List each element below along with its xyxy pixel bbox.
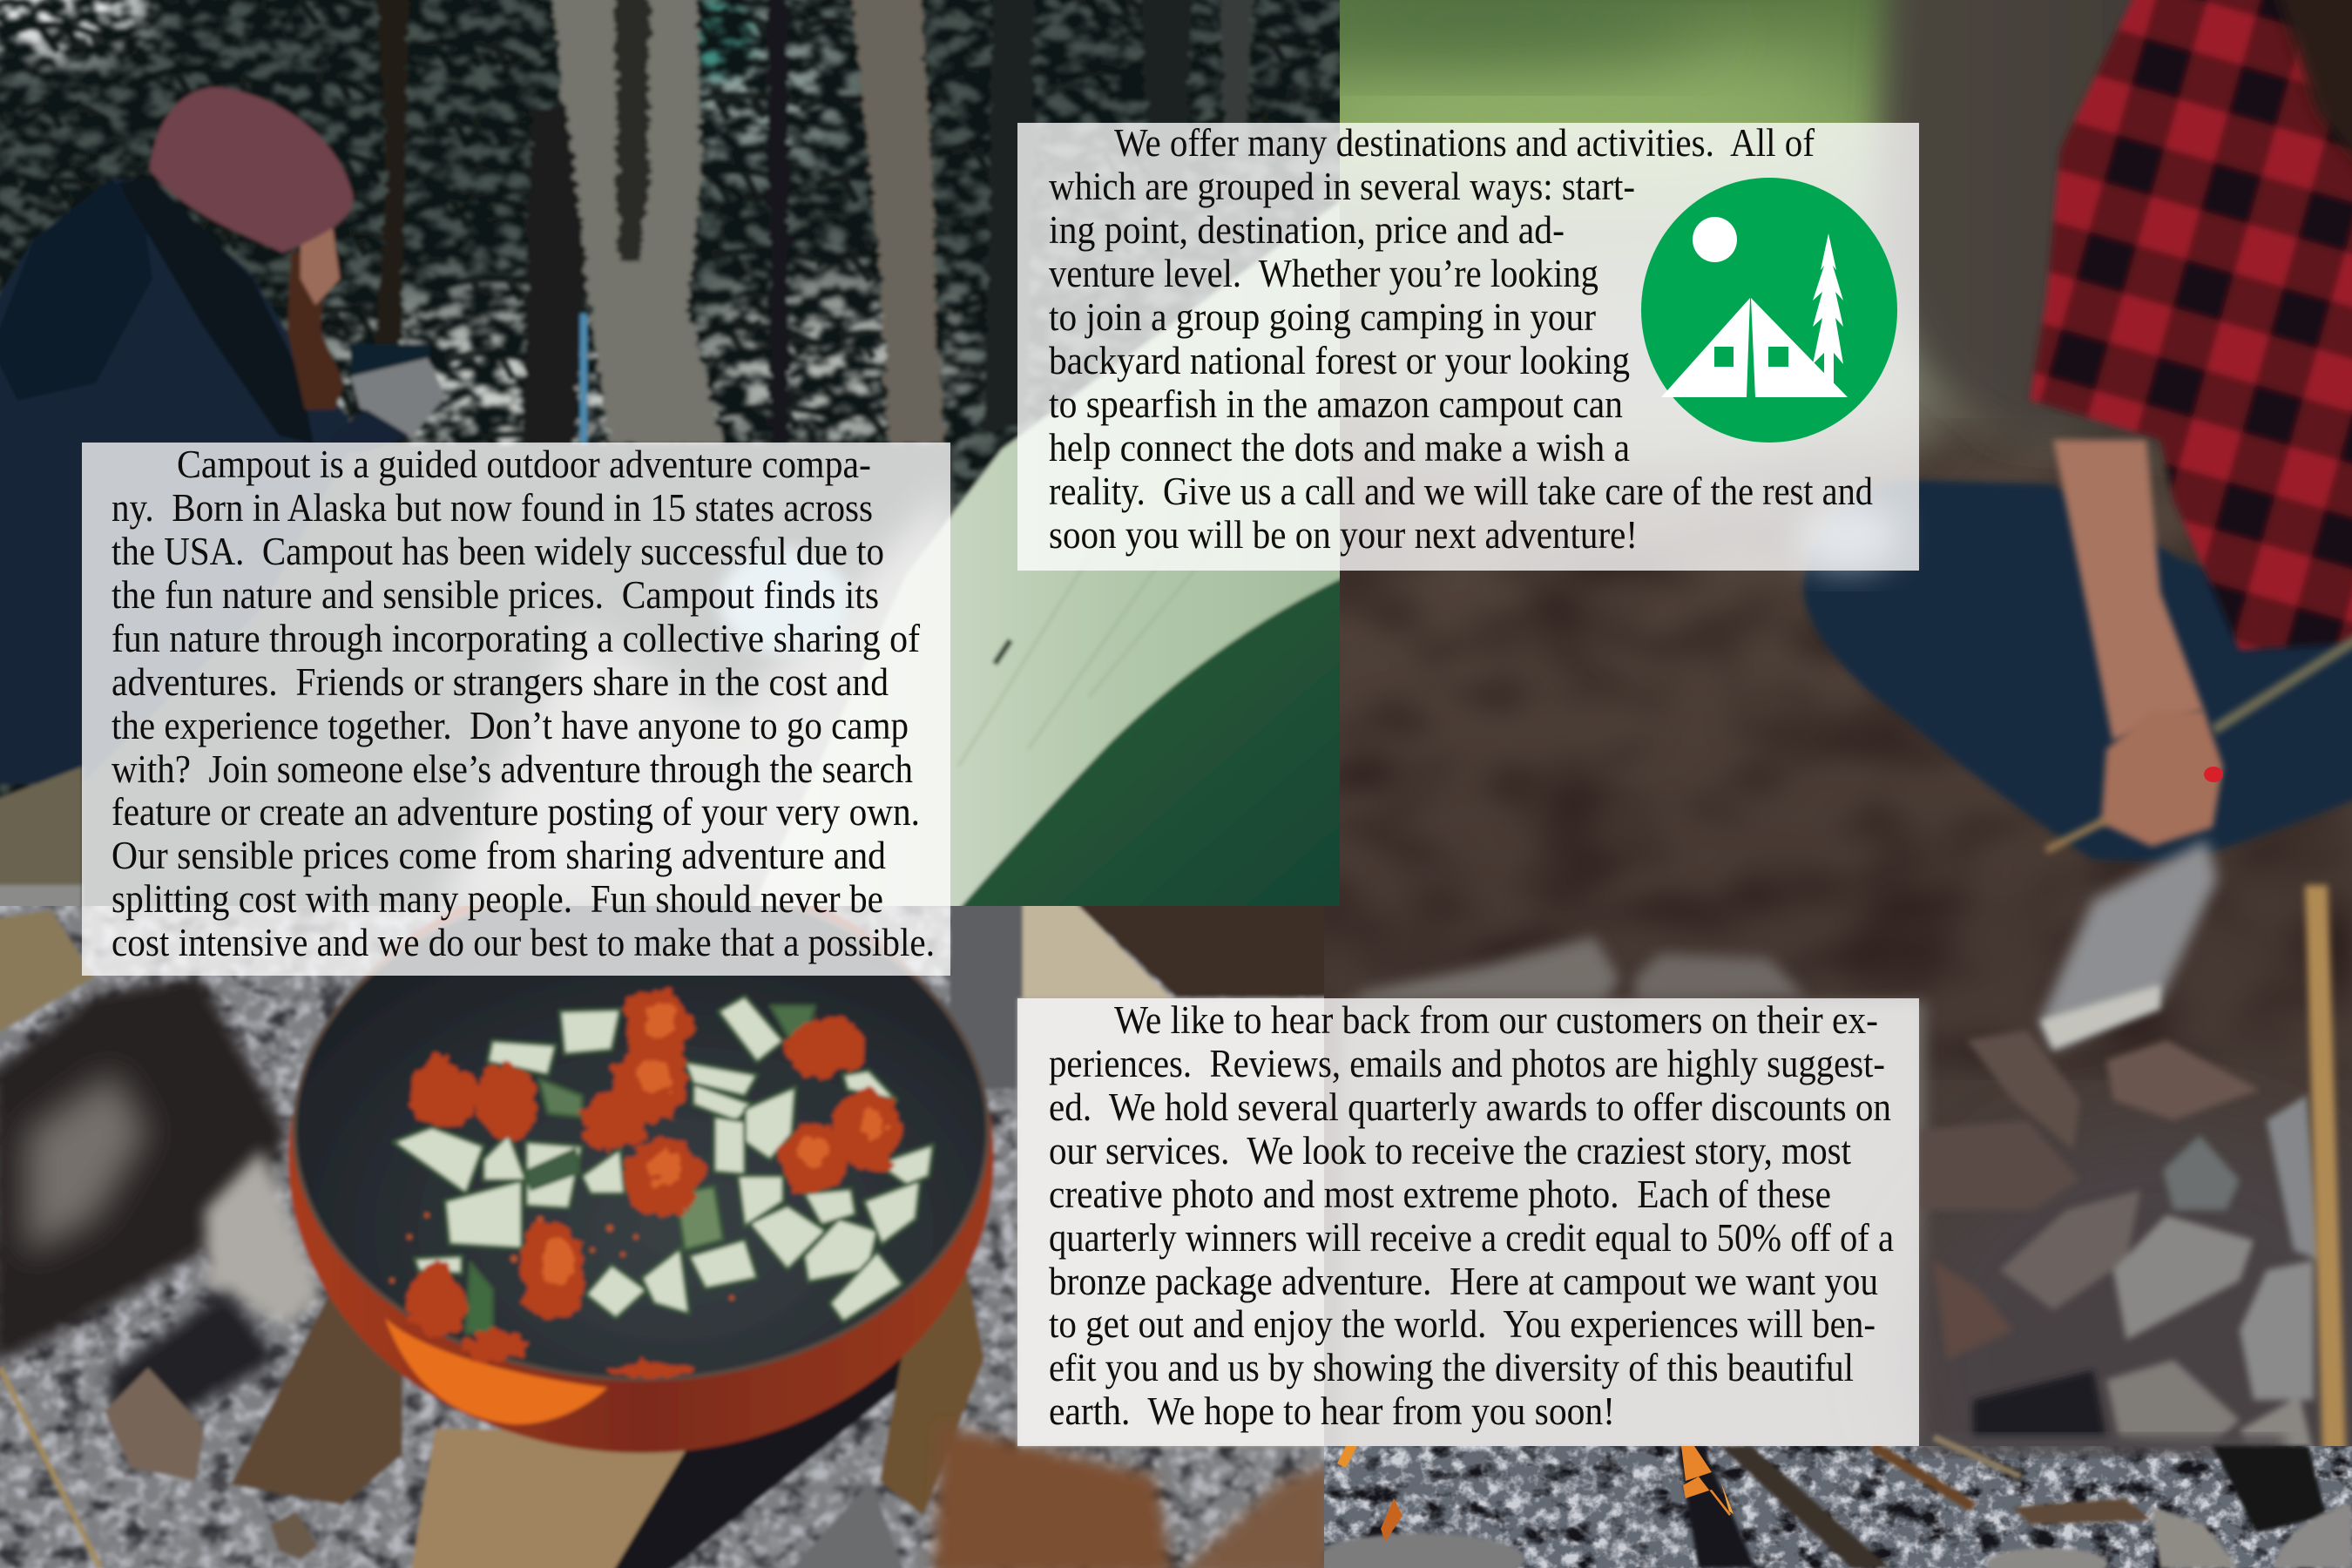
woman: hair xyxy=(287,251,344,409)
shirt xyxy=(2030,0,2352,650)
shoe xyxy=(2040,840,2217,1050)
text panel: customer reviews: our services. We look to receive the craziest story, most xyxy=(1049,1129,1851,1173)
food: zucchini xyxy=(394,997,933,1333)
stones and rocks xyxy=(1343,931,2352,1446)
text panel: company introduction: with? Join someone else’s adventure through the search xyxy=(112,747,913,791)
tent xyxy=(749,196,1348,915)
text panel: destinations and activities: help connect the dots and make a wish a xyxy=(1049,426,1630,470)
hand xyxy=(2101,710,2223,847)
woman: hat xyxy=(150,87,353,253)
woman: jacket xyxy=(0,87,445,915)
text panel: company introduction: splitting cost with many people. Fun should never be xyxy=(112,877,883,921)
food: spice flecks xyxy=(389,1213,734,1301)
photo: person crouching by campfire xyxy=(1254,0,2352,1568)
text panel: destinations and activities: to spearfish in the amazon campout can xyxy=(1049,382,1623,426)
stick xyxy=(2046,632,2352,850)
flames xyxy=(1337,1446,1734,1542)
photo: cooking pan over fire xyxy=(0,864,1333,1568)
text panel: destinations and activities: ing point, destination, price and ad- xyxy=(1049,208,1565,252)
wood pieces xyxy=(0,910,94,1037)
photo: woman in forest with tent xyxy=(0,0,1350,915)
text panel: customer reviews: bronze package adventure. Here at campout we want you xyxy=(1049,1260,1878,1303)
ash bed xyxy=(1307,1436,2352,1568)
text panel: destinations and activities xyxy=(1017,121,1919,571)
pan interior xyxy=(294,881,988,1379)
text panel: destinations and activities: which are grouped in several ways: start- xyxy=(1049,165,1635,208)
text panel: company introduction: feature or create an adventure posting of your very own. xyxy=(112,790,920,834)
text panel: company introduction: adventures. Friends or strangers share in the cost and xyxy=(112,660,889,704)
text panel: customer reviews: periences. Reviews, emails and photos are highly suggest- xyxy=(1049,1042,1885,1085)
woman: glove xyxy=(351,358,445,439)
food: sausage xyxy=(406,989,903,1378)
charred logs xyxy=(1315,1437,2352,1568)
icon: campout logo xyxy=(1641,178,1897,443)
text panel: customer reviews: earth. We hope to hear from you soon! xyxy=(1049,1389,1615,1433)
text panel: customer reviews: We like to hear back from our customers on their ex- xyxy=(1114,998,1878,1042)
text panel: company introduction: the USA. Campout has been widely successful due to xyxy=(112,530,884,573)
arm xyxy=(2053,440,2204,740)
foliage xyxy=(0,0,1350,915)
text panel: company introduction: cost intensive and we do our best to make that a possible. xyxy=(112,921,935,964)
text panel: destinations and activities: backyard national forest or your looking xyxy=(1049,339,1630,382)
text panel: company introduction: ny. Born in Alaska but now found in 15 states across xyxy=(112,486,873,530)
text panel: company introduction xyxy=(82,443,950,976)
text panel: customer reviews: ed. We hold several quarterly awards to offer discounts on xyxy=(1049,1085,1891,1129)
text panel: customer reviews: creative photo and most extreme photo. Each of these xyxy=(1049,1173,1831,1216)
wooden post xyxy=(2305,885,2347,1480)
burnt log on the left xyxy=(0,976,287,1368)
text panel: customer reviews: to get out and enjoy the world. You experiences will ben- xyxy=(1049,1302,1876,1346)
text panel: destinations and activities: We offer many destinations and activities. All of xyxy=(1114,121,1815,165)
text panel: destinations and activities: venture level. Whether you’re looking xyxy=(1049,252,1598,295)
text panel: company introduction: Our sensible prices come from sharing adventure and xyxy=(112,834,886,877)
text panel: customer reviews: quarterly winners will receive a credit equal to 50% off of a xyxy=(1049,1216,1894,1260)
text panel: company introduction: Campout is a guided outdoor adventure compa- xyxy=(177,443,871,486)
pan handle xyxy=(385,1318,607,1424)
text panel: company introduction: the experience together. Don’t have anyone to go camp xyxy=(112,704,909,747)
tree trunks xyxy=(375,0,1254,444)
scene behind text panel xyxy=(82,444,953,915)
woman: mug xyxy=(349,344,430,383)
text panel: customer reviews: efit you and us by showing the diversity of this beautiful xyxy=(1049,1346,1854,1389)
pan body xyxy=(288,864,994,1453)
text panel: destinations and activities: soon you will be on your next adventure! xyxy=(1049,513,1638,557)
text panel: destinations and activities: reality. Give us a call and we will take care of the rest and xyxy=(1049,470,1873,513)
text panel: customer reviews xyxy=(1017,998,1919,1446)
text panel: company introduction: the fun nature and sensible prices. Campout finds its xyxy=(112,573,879,617)
woman: face xyxy=(301,228,340,305)
text panel: destinations and activities: to join a group going camping in your xyxy=(1049,295,1596,339)
jeans xyxy=(1803,480,2352,862)
text panel: company introduction: fun nature through incorporating a collective sharing of xyxy=(112,617,920,660)
